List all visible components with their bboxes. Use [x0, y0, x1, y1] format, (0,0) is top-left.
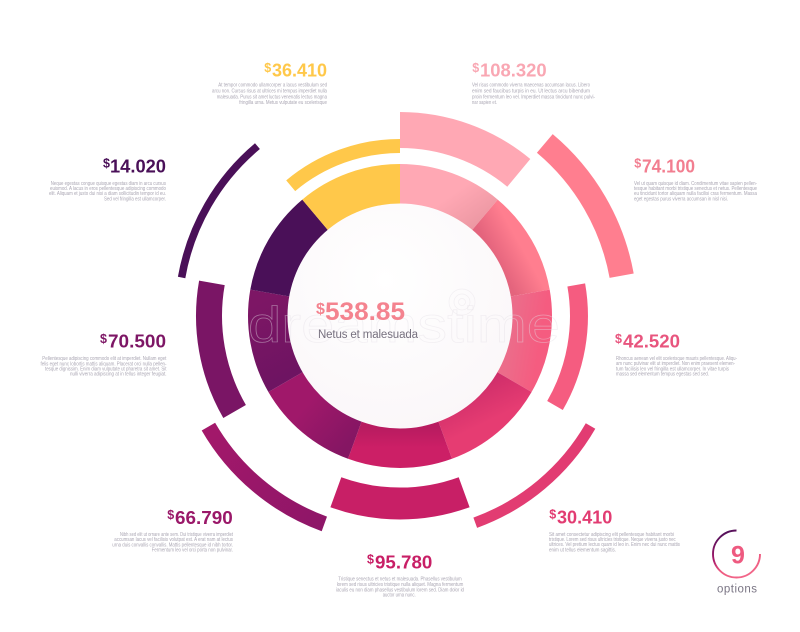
- outer arc 1: $108.320: [400, 112, 530, 187]
- description: [616, 356, 737, 378]
- segment 8: dark purple: [250, 200, 329, 297]
- description: arcu non. Cursus risus at ultrices mi tempus imperdiet nulla: [212, 88, 327, 94]
- description: urna duis convallis convallis. Mattis pellentesque id nibh tortor.: [112, 542, 233, 548]
- value: $: [634, 156, 641, 170]
- description: eget egestas purus viverra accumsan in nisl nisi.: [634, 196, 728, 202]
- description: massa sed elementum tempus egestas sed sed.: [616, 372, 709, 378]
- segment 1: light pink: [400, 164, 498, 232]
- description: euismod. A lacus in eros pellentesque adipiscing commodo: [50, 186, 166, 192]
- description: [40, 356, 167, 378]
- segment 2: coral pink: [471, 200, 550, 297]
- description: malesuada. Purus sit amet luctus venenatis lectus magna: [217, 94, 327, 100]
- description: Sit amet consectetur adipiscing elit pellentesque habitant morbi: [549, 532, 674, 538]
- value: $: [167, 508, 174, 522]
- description: tum facilisis leo vel fringilla est ullamcorper. In vitae turpis: [616, 367, 729, 373]
- description: [472, 83, 595, 106]
- block: $70.500: [40, 332, 167, 378]
- block: $36.410: [212, 61, 327, 106]
- segment 7: plum: [248, 290, 305, 392]
- description: felis eget nunc lobortis mattis aliquam. Placerat orci nulla pellen-: [40, 361, 167, 367]
- block: $74.100: [634, 156, 757, 202]
- description: nulli viverra adipiscing at in tellus integer feugiat.: [70, 372, 166, 378]
- description: Pellentesque adipiscing commodo elit at imperdiet. Nullam eget: [42, 356, 167, 362]
- outer arc 6: $66.790: [202, 423, 327, 531]
- description: am nunc pulvinar elit ut imperdiet. Non enim praesent elemen-: [616, 361, 735, 367]
- description: Vel risus commodo viverra maecenas accumsan lacus. Libero: [472, 83, 590, 89]
- outer arc 4: $30.410: [473, 423, 595, 528]
- outer arc 2: $74.100: [537, 134, 634, 278]
- value: 14.020: [110, 156, 166, 176]
- value: $: [549, 508, 556, 522]
- description: tristique. Lorem sed risus ultricies tristique. Neque viverra justo nec: [549, 537, 676, 543]
- value: 36.410: [272, 61, 327, 81]
- value: 42.520: [623, 332, 680, 352]
- value: 66.790: [175, 508, 233, 528]
- block: $108.320: [472, 61, 595, 106]
- center total: [316, 298, 419, 341]
- block: $66.790: [112, 508, 233, 554]
- value: $: [367, 552, 374, 566]
- watermark: dreamstime: [248, 297, 560, 353]
- value: 30.410: [557, 507, 612, 527]
- segment 4: deep rose: [438, 371, 532, 459]
- description: proin fermentum leo vel. Imperdiet massa tincidunt nunc pulvi-: [472, 94, 595, 100]
- block: $30.410: [549, 507, 680, 553]
- total value: 538.85: [325, 298, 405, 326]
- inner donut ring: [248, 164, 552, 468]
- description: tesque dignissim. Enim diam vulputate ut pharetra sit amet. Sit: [45, 367, 167, 373]
- value: 108.320: [480, 61, 547, 81]
- description: eu tincidunt tortor aliquam nulla facilisi cras fermentum. Massa: [634, 191, 757, 197]
- description: fringilla urna. Metus vulputate eu scelerisque: [239, 100, 327, 106]
- description: Sed vel fringilla est ullamcorper.: [104, 196, 166, 202]
- outer arc 9: $36.410: [286, 139, 400, 191]
- option label: options: [717, 584, 757, 596]
- description: [634, 181, 757, 202]
- block: $42.520: [615, 332, 737, 378]
- value: $: [264, 61, 271, 75]
- center disc: [288, 204, 512, 428]
- icon: progress ring: [713, 530, 760, 577]
- description: ultrices. Vel pretium lectus quam id leo in. Enim nec dui nunc mattis: [549, 542, 680, 548]
- description: auctor urna nunc.: [383, 593, 416, 599]
- description: [49, 181, 166, 202]
- description: elit. Aliquam et justo dui nisi a diam sollicitudin tempor id eu.: [49, 191, 166, 197]
- description: enim sed faucibus turpis in eu. Ut lectus arcu bibendum: [472, 88, 590, 94]
- description: Tristique senectus et netus et malesuada. Phasellus vestibulum: [338, 577, 462, 583]
- description: enim ut tellus elementum sagittis.: [549, 547, 616, 553]
- description: Neque egestas congue quisque egestas diam in arcu cursus: [51, 181, 166, 187]
- total value: $: [316, 301, 325, 318]
- description: Fermentum leo vel orci porta non pulvinar.: [152, 548, 233, 554]
- segment 6: magenta: [268, 371, 362, 459]
- value: 74.100: [642, 156, 695, 176]
- outer arc 5: $95.780: [330, 477, 470, 519]
- segment 9: yellow: [302, 164, 400, 232]
- description: [112, 532, 233, 554]
- outer arc 7: $70.500: [196, 281, 246, 418]
- value: $: [472, 61, 479, 75]
- outer arc 3: $42.520: [547, 283, 588, 410]
- description: [549, 532, 680, 553]
- value: $: [615, 332, 622, 346]
- description: tesque habitant morbi tristique senectus et netus. Pellentesque: [634, 186, 757, 192]
- description: Nibh sed elit ut ornare ante sem. Dui tristique viverra imperdiet: [120, 532, 233, 538]
- option count: 9: [731, 541, 745, 569]
- outer arc 8: $14.020: [178, 143, 260, 278]
- description: [336, 577, 464, 599]
- description: At tempor commodo ullamcorper a lacus vestibulum sed: [218, 83, 327, 89]
- options badge: [713, 530, 760, 596]
- value: $: [100, 332, 107, 346]
- value: $: [103, 156, 110, 170]
- description: lorem sed risus ultricies tristique nulla aliquet. Magna fermentum: [337, 582, 463, 588]
- block: $14.020: [49, 156, 166, 202]
- description: iaculis eu non diam phasellus vestibulum lorem sed. Diam dolor id: [336, 588, 464, 594]
- description: Vel ut quam quisque id diam. Condimentum vitae sapien pellen-: [634, 181, 757, 187]
- value: 95.780: [375, 552, 432, 572]
- segment 5: crimson: [348, 419, 452, 468]
- segment 3: rose: [495, 290, 552, 392]
- block: $95.780: [336, 552, 464, 599]
- description: nar sapien et.: [472, 100, 497, 106]
- total caption: Netus et malesuada: [318, 329, 419, 341]
- description: [212, 83, 327, 106]
- value: 70.500: [108, 332, 166, 352]
- description: Rhoncus aenean vel elit scelerisque mauris pellentesque. Aliqu-: [616, 356, 737, 362]
- description: accumsan lacus vel facilisis volutpat est. A erat nam at lectus: [114, 537, 233, 543]
